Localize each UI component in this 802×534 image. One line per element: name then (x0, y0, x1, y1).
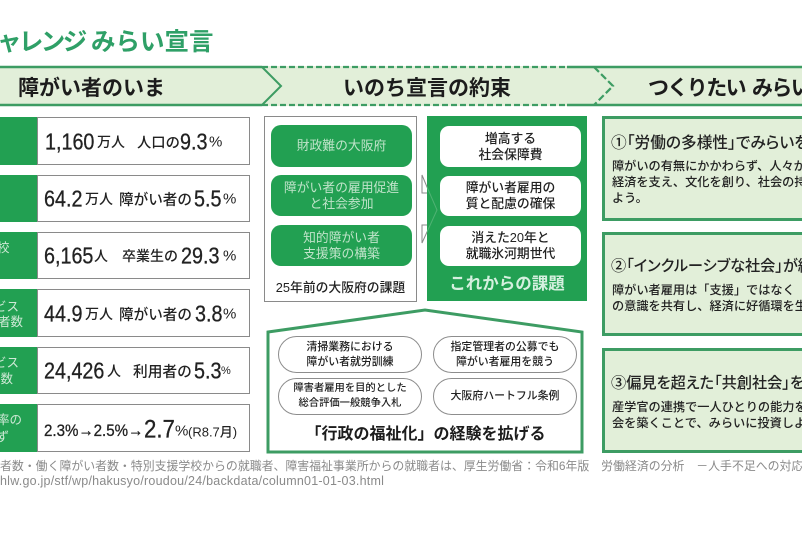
panel: vision 2 (602, 232, 802, 336)
white card: social security: 社会保障費 (478, 146, 542, 162)
row 4 value: 44.9 (44, 300, 82, 326)
row 3 value: 6,165 (44, 243, 93, 269)
row 4 value: 障がい者の (119, 307, 192, 323)
panel: issues 25 years ago (264, 116, 417, 302)
row 6 value: % (175, 422, 188, 439)
white card: quality of employment (440, 176, 581, 216)
header band (0, 66, 802, 106)
pill: heartful ordinance: 大阪府ハートフル条例 (451, 390, 559, 402)
row 6 value (37, 404, 250, 452)
row 1 value: 万人 (97, 134, 125, 150)
row 5 value: % (221, 365, 231, 377)
vision 1 body (612, 159, 802, 205)
white card: lost 20 years: 消えた20年と (471, 230, 550, 245)
white card: social security (440, 126, 581, 167)
row 1 value (37, 117, 250, 165)
row 2 value: % (223, 191, 236, 208)
row 3 value: 29.3 (181, 243, 219, 269)
pill: designated manager: 障がい者雇用を競う (456, 356, 554, 368)
row 2 value (37, 175, 250, 222)
panel: future issues (427, 116, 587, 301)
row 4 value (37, 289, 250, 337)
arrow (422, 174, 438, 244)
row 2 label (0, 175, 37, 222)
white card: quality of employment: 障がい者雇用の (466, 180, 555, 195)
caption: issues 25 years ago: 25年前の大阪府の課題 (276, 280, 405, 295)
vision 2 body (612, 283, 802, 313)
pill: employment promotion (271, 175, 412, 216)
heading: future (648, 77, 802, 100)
row 3 value: 卒業生の (122, 248, 178, 264)
white card: lost 20 years (440, 226, 581, 266)
title: みらい宣言 (91, 29, 214, 56)
row 6 value: 2.3%→2.5%→ (44, 421, 143, 440)
pill: heartful ordinance (433, 378, 577, 415)
row 5 label: 数 (0, 372, 13, 386)
row 6 label (0, 404, 37, 452)
row 3 value: 人 (94, 248, 108, 264)
row 4 value: 万人 (85, 306, 113, 322)
row 1 value: 9.3 (180, 128, 207, 154)
pill: cleaning training: 障がい者就労訓練 (306, 356, 394, 368)
row 2 value: 障がい者の (119, 193, 192, 209)
white card: lost 20 years: 就職氷河期世代 (466, 246, 555, 261)
pill: fiscal difficulty (271, 125, 412, 167)
row 3 label (0, 232, 37, 279)
row 1 value: % (209, 133, 222, 150)
row 1 value: 1,160 (45, 128, 94, 154)
white card: quality of employment: 質と配慮の確保 (466, 196, 555, 211)
pill: designated manager: 指定管理者の公募でも (451, 341, 559, 353)
row 1 value: 人口の (137, 135, 180, 151)
footnote line 1: 者数・働く障がい者数・特別支援学校からの就職者、障害福祉事業所からの就職者は、厚生労働省：令和6年版 労働経済の分析 －人手不足への対応 (0, 459, 802, 473)
panel: statistics rows (0, 117, 250, 452)
pill: competitive bidding: 総合評価一般競争入札 (298, 398, 401, 408)
row 6 value: (R8.7月) (188, 424, 237, 439)
pill: intellectual disability support (271, 225, 412, 266)
panel: vision 1 (602, 116, 802, 221)
vision 1 body: 障がいの有無にかかわらず、人々が (612, 159, 802, 173)
title (0, 29, 214, 56)
row 4 label (0, 289, 37, 337)
pill: competitive bidding: 障害者雇用を目的とした (293, 383, 407, 394)
pill: cleaning training: 清掃業務における (306, 341, 394, 353)
heading: current state: 障がい者のいま (18, 77, 165, 100)
pill: designated manager (433, 336, 577, 373)
vision 3 body: 産学官の連携で一人ひとりの能力を (612, 400, 802, 414)
row 5 value: 5.3 (194, 358, 221, 384)
row 1 label (0, 117, 37, 165)
row 6 value: 2.7 (144, 415, 175, 443)
pill: intellectual disability support: 知的障がい者 (303, 230, 380, 244)
row 3 value: % (223, 248, 236, 265)
pill: fiscal difficulty: 財政難の大阪府 (297, 138, 386, 153)
row 5 value: 利用者の (133, 365, 192, 381)
footnote line 2: hlw.go.jp/stf/wp/hakusyo/roudou/24/backdata/column01-01-03.html (0, 474, 384, 488)
vision 1 body: よう。 (612, 191, 648, 205)
heading: future: つくりたい (648, 77, 745, 100)
heading: expand experience: 「行政の福祉化」の経験を拡げる (305, 426, 546, 443)
row 5 value: 24,426 (44, 358, 104, 384)
vision 3 heading: ③偏見を超えた「共創社会」を (611, 375, 802, 392)
row 5 value: 人 (107, 363, 121, 379)
pill: employment promotion: と社会参加 (310, 196, 373, 210)
row 2 value: 万人 (85, 191, 113, 207)
vision 3 body (612, 400, 802, 430)
pill: intellectual disability support: 支援策の構築 (303, 246, 380, 260)
pill: competitive bidding (278, 378, 422, 415)
row 5 value (37, 347, 250, 394)
row 5 label (0, 347, 37, 394)
heading: future issues: これからの課題 (449, 275, 565, 293)
panel: house (266, 308, 584, 454)
white card: social security: 増高する (485, 130, 536, 146)
row 2 value: 64.2 (44, 186, 82, 212)
row 4 value: 3.8 (195, 300, 222, 326)
pill: employment promotion: 障がい者の雇用促進 (284, 180, 399, 194)
row 2 value: 5.5 (194, 186, 221, 212)
heading: pledge: いのち宣言の約束 (343, 77, 511, 100)
pill: cleaning training (278, 336, 422, 373)
panel: vision 3 (602, 348, 802, 453)
row 3 value (37, 232, 250, 279)
row 4 value: % (223, 305, 236, 322)
